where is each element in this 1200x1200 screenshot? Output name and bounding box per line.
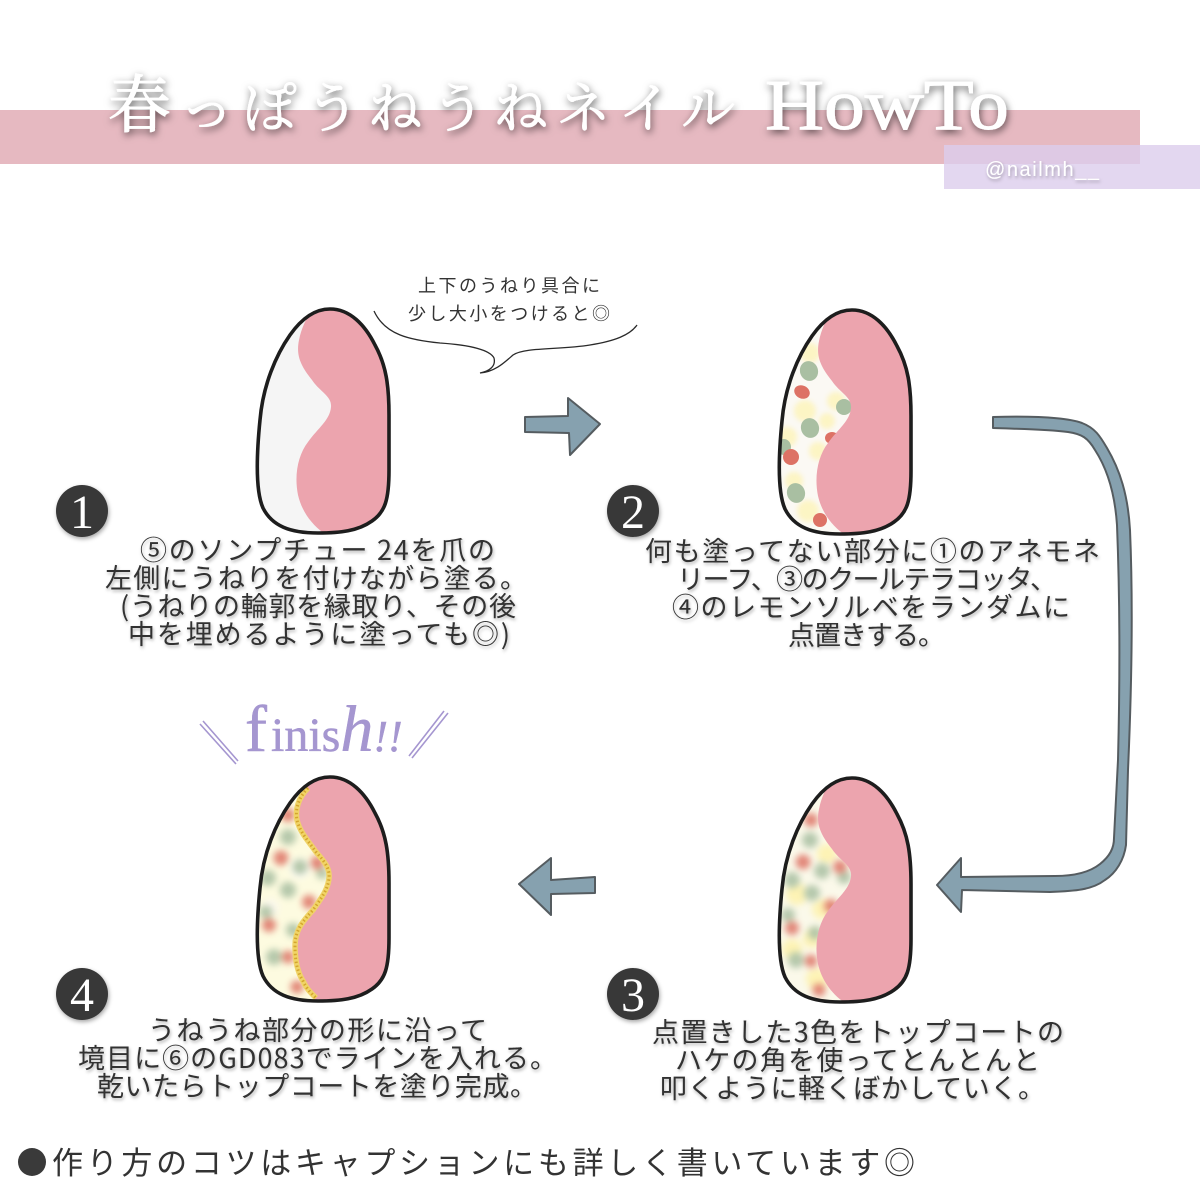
step 1 text: (うねりの輪郭を縁取り、その後 xyxy=(120,585,516,624)
nail 1 xyxy=(256,307,391,535)
step 4 text: 乾いたらトップコートを塗り完成。 xyxy=(97,1065,537,1104)
badge 1: 1 xyxy=(70,486,94,539)
step 3 text: 点置きした3色をトップコートの xyxy=(652,1011,1064,1050)
step 2 text xyxy=(645,530,1100,653)
step 4 text: うねうね部分の形に沿って xyxy=(148,1009,487,1048)
callout bubble: 上下のうねり具合に xyxy=(418,272,600,298)
step 2 text: ④のレモンソルベをランダムに xyxy=(672,586,1070,625)
step 1 text: 左側にうねりを付けながら塗る。 xyxy=(105,557,527,596)
step 3 text xyxy=(652,1011,1064,1106)
handle tag xyxy=(944,145,1200,189)
handle tag: @nailmh__ xyxy=(985,159,1100,181)
badge 4 xyxy=(56,968,108,1022)
title xyxy=(108,55,1009,146)
badge 4: 4 xyxy=(70,969,94,1022)
callout bubble xyxy=(374,272,637,373)
arrow: step 3 to 4 xyxy=(519,858,595,915)
step 4 text: 境目に⑥のGD083でラインを入れる。 xyxy=(78,1037,557,1076)
step 1 text xyxy=(105,529,527,652)
finish heading: finish!! xyxy=(245,693,403,766)
callout bubble: 少し大小をつけると◎ xyxy=(408,300,610,326)
finish heading xyxy=(200,693,448,766)
title band xyxy=(0,110,1140,164)
title: HowTo xyxy=(765,65,1009,145)
arrow: step 2 to 3 xyxy=(937,417,1132,912)
title: 春っぽうねうねネイル xyxy=(108,55,735,146)
badge 1 xyxy=(56,485,108,539)
nail 2 xyxy=(778,308,913,536)
footer note: 作り方のコツはキャプションにも詳しく書いています◎ xyxy=(52,1138,915,1183)
step 1 text: ⑤のソンプチュー 24を爪の xyxy=(140,529,495,568)
badge 3: 3 xyxy=(621,969,645,1022)
step 4 text xyxy=(78,1009,557,1104)
badge 2: 2 xyxy=(621,486,645,539)
step 3 text: 叩くように軽くぼかしていく。 xyxy=(660,1067,1045,1106)
step 2 text: 点置きする。 xyxy=(788,614,945,653)
badge 2 xyxy=(607,485,659,539)
step 2 text: 何も塗ってない部分に①のアネモネ xyxy=(645,530,1100,569)
nail 4 xyxy=(256,775,391,1003)
nail 3 xyxy=(778,776,913,1004)
step 1 text: 中を埋めるように塗っても◎) xyxy=(128,613,510,652)
badge 3 xyxy=(607,968,659,1022)
step 2 text: リーフ、③のクールテラコッタ、 xyxy=(677,558,1057,597)
step 3 text: ハケの角を使ってとんとんと xyxy=(675,1039,1040,1078)
arrow: step 1 to 2 xyxy=(525,398,600,455)
